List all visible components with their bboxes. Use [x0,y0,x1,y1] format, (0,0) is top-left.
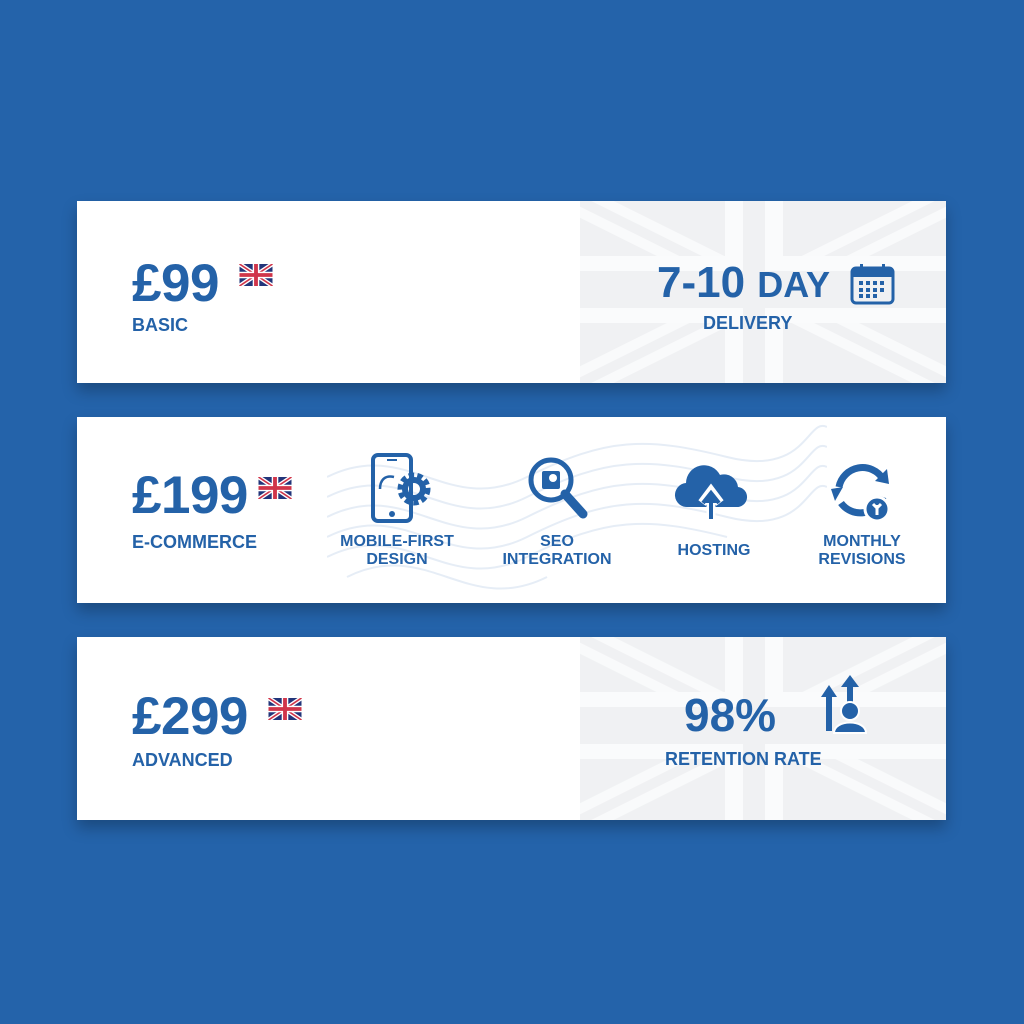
stat: 98%: 98% [684,689,776,741]
icon: uk flag [258,477,292,499]
ghost flag background [580,637,946,820]
feature: seo integration [502,458,612,568]
text [502,533,612,568]
text: REVISIONS [818,551,906,568]
label: delivery: DELIVERY [703,313,792,333]
price: £199: £199 [132,466,248,525]
text [340,533,454,568]
ghost flag background [580,201,946,383]
icon: magnifier [528,458,588,518]
price: £299: £299 [132,687,248,746]
stat: 7-10 day: 7-10 DAY [657,258,830,307]
text: INTEGRATION [502,551,612,568]
icon: refresh wrench [831,464,889,520]
feature: hosting [674,465,750,559]
text: MONTHLY [823,533,901,550]
label: basic: BASIC [132,315,188,335]
price: £99: £99 [132,254,219,313]
feature: mobile-first design [340,453,454,568]
icon: growth person [821,675,867,734]
text: MOBILE-FIRST [340,533,454,550]
feature: monthly revisions [818,464,906,568]
label: advanced: ADVANCED [132,750,233,770]
decorative waves [327,425,827,590]
text: SEO [540,533,574,550]
panel: basic [77,201,946,383]
icon: uk flag [268,698,302,720]
text [818,533,906,568]
label: retention rate: RETENTION RATE [665,749,822,769]
icon: cloud upload [674,465,748,519]
text: DESIGN [366,551,428,568]
panel: advanced [77,637,946,820]
text: HOSTING [678,542,750,559]
icon: phone gear [371,453,430,523]
icon: uk flag [239,264,273,286]
icon: calendar [850,264,894,304]
label: e-commerce: E-COMMERCE [132,532,257,552]
panel: e-commerce [77,417,946,603]
